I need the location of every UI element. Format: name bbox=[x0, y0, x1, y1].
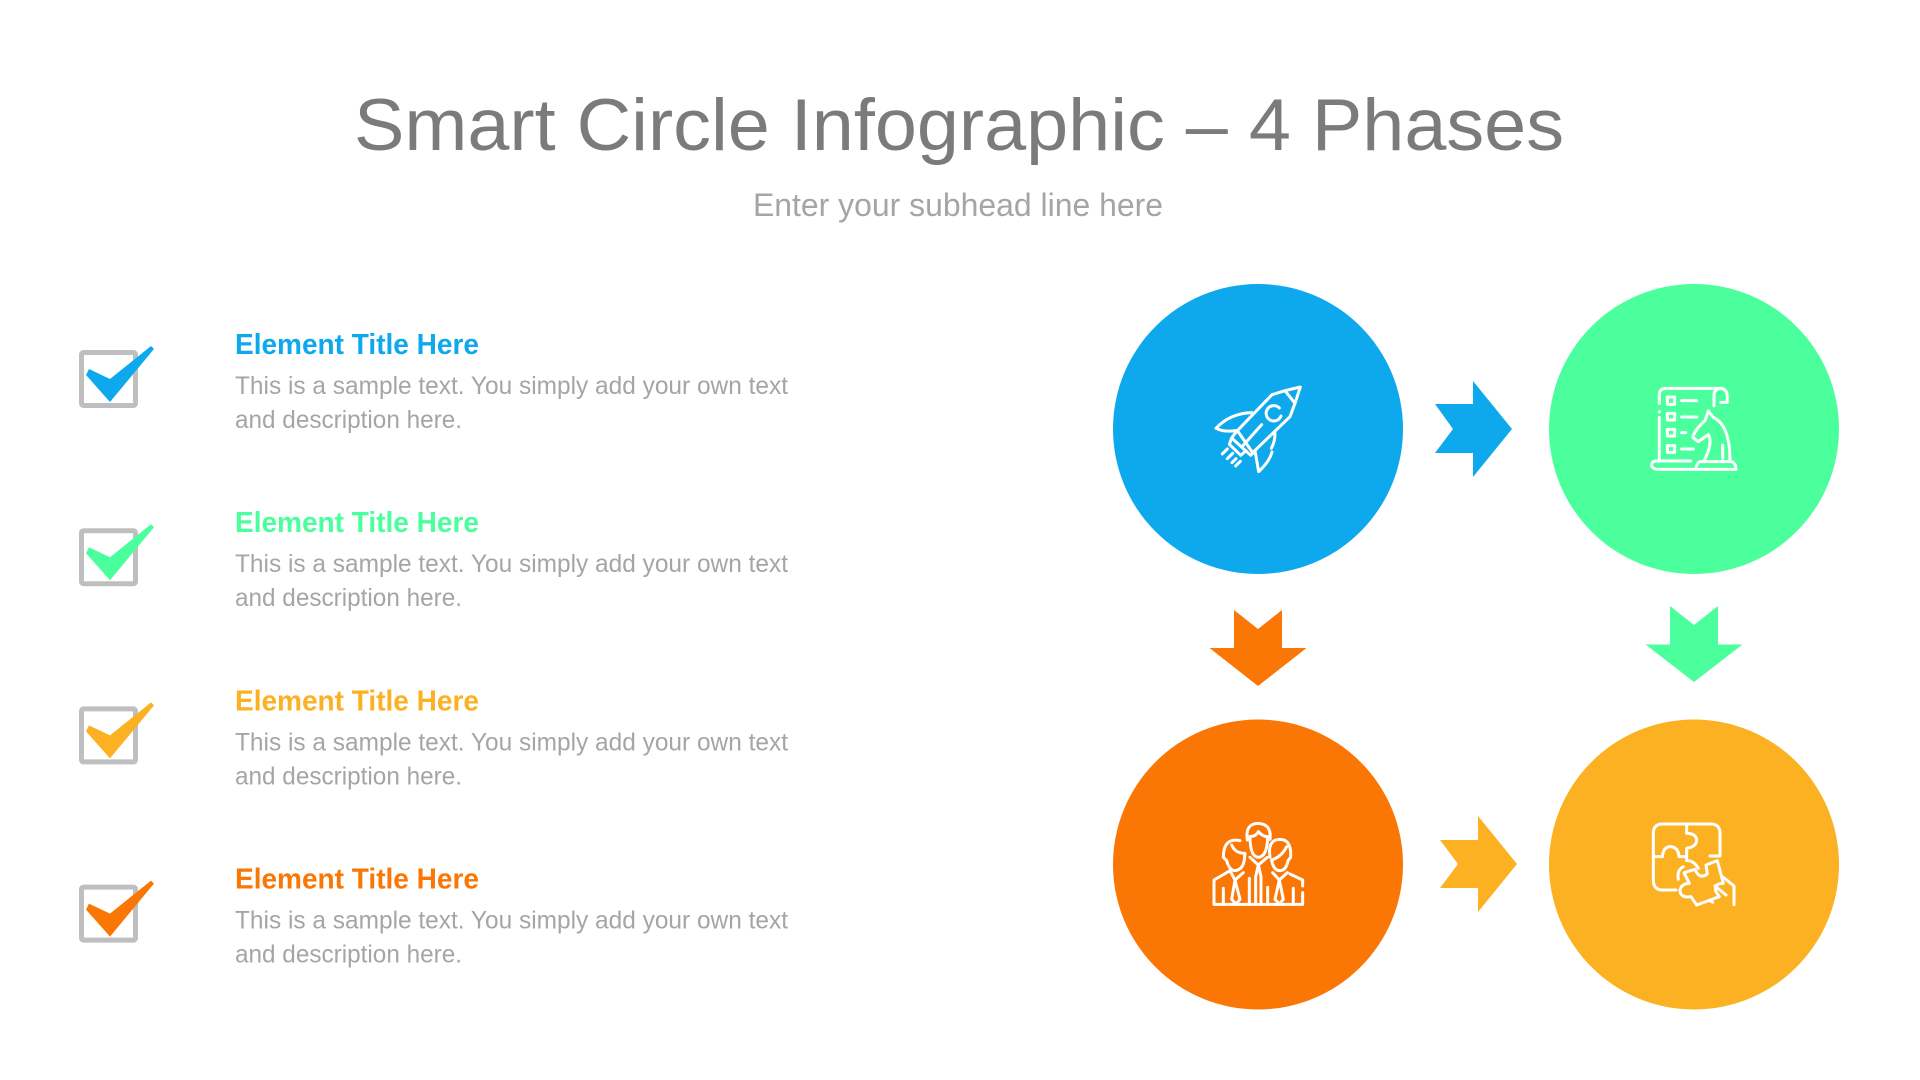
item 4 description bbox=[235, 907, 788, 969]
item 3 description: and description here. bbox=[235, 762, 462, 790]
item 3: yellow checklist entry bbox=[82, 685, 788, 790]
arrow: blue right bbox=[1435, 381, 1512, 477]
item 2 description bbox=[235, 550, 788, 612]
checkbox 2 bbox=[82, 524, 154, 584]
circle: blue phase bbox=[1113, 284, 1403, 574]
item 4 description: and description here. bbox=[235, 941, 462, 969]
checkbox 1 bbox=[82, 346, 154, 406]
item 3 description bbox=[235, 728, 788, 790]
checkbox 4 bbox=[82, 881, 154, 940]
item 1 title: Element Title Here bbox=[235, 329, 479, 361]
icon: strategy scroll with chess knight bbox=[1652, 388, 1736, 469]
checkbox 3 bbox=[82, 702, 154, 762]
item 4 title: Element Title Here bbox=[235, 864, 479, 896]
circle: orange phase bbox=[1113, 720, 1403, 1010]
item 1 description: and description here. bbox=[235, 406, 462, 434]
arrow: yellow right bbox=[1440, 816, 1517, 912]
title: Smart Circle Infographic – 4 Phases bbox=[354, 85, 1564, 166]
icon: team of three people bbox=[1214, 823, 1303, 904]
item 1: blue checklist entry bbox=[82, 329, 788, 434]
item 1 description: This is a sample text. You simply add your own text bbox=[235, 372, 788, 400]
item 3 title: Element Title Here bbox=[235, 685, 479, 717]
item 2 description: This is a sample text. You simply add your own text bbox=[235, 550, 788, 578]
item 1 description bbox=[235, 372, 788, 434]
subhead: Enter your subhead line here bbox=[753, 187, 1163, 223]
arrow: orange down bbox=[1210, 610, 1306, 686]
item 4: orange checklist entry bbox=[82, 864, 788, 969]
item 2 description: and description here. bbox=[235, 584, 462, 612]
icon: rocket bbox=[1216, 387, 1300, 472]
circle: yellow phase bbox=[1549, 720, 1839, 1010]
arrow: green down bbox=[1646, 606, 1742, 682]
item 3 description: This is a sample text. You simply add your own text bbox=[235, 728, 788, 756]
icon: puzzle pieces in hand bbox=[1653, 824, 1734, 905]
circle: green phase bbox=[1549, 284, 1839, 574]
item 2 title: Element Title Here bbox=[235, 507, 479, 539]
item 2: green checklist entry bbox=[82, 507, 788, 612]
item 4 description: This is a sample text. You simply add your own text bbox=[235, 907, 788, 935]
